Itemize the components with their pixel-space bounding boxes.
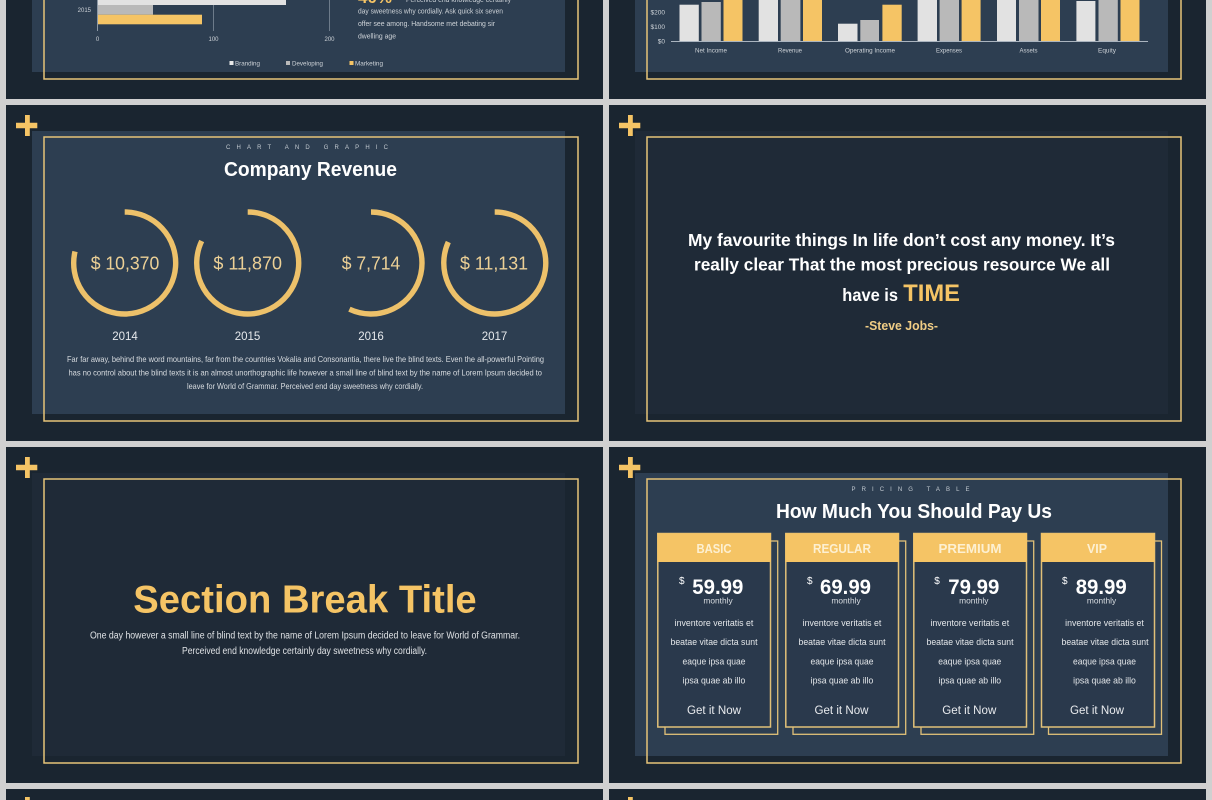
pricing card: vip: VIP xyxy=(1087,541,1107,556)
pricing card: basic: inventore veritatis et xyxy=(675,618,754,629)
pricing card: basic: BASIC xyxy=(696,541,732,556)
icon: plus xyxy=(16,457,37,478)
ring: 2014: 2014 xyxy=(112,331,138,343)
bar chart: 2015: 100 xyxy=(208,37,219,43)
pricing card: premium: inventore veritatis et xyxy=(930,618,1009,629)
column chart: $100 xyxy=(651,24,665,31)
pricing card: premium: ipsa quae ab illo xyxy=(938,676,1001,686)
ring: 2017 xyxy=(444,212,546,343)
panel: cropped slide bottom right xyxy=(609,789,1206,800)
eyebrow label: CHART AND GRAPHIC xyxy=(226,145,389,151)
pricing card: basic: ipsa quae ab illo xyxy=(683,676,745,686)
pricing card: regular: inventore veritatis et xyxy=(803,618,882,629)
quote: really clear That the most precious resource We all xyxy=(694,254,1110,274)
pricing card: regular: REGULAR xyxy=(813,541,872,556)
ring: 2014 xyxy=(74,212,176,343)
ring: 2015: 2015 xyxy=(235,331,260,343)
pricing card: basic xyxy=(657,533,778,734)
column chart: Expenses xyxy=(936,48,963,55)
section description: One day however a small line of blind text by the name of Lorem Ipsum decided to leave for World of Grammar. xyxy=(90,630,520,642)
pricing card: regular: Get it Now xyxy=(814,705,869,717)
pricing card: vip: inventore veritatis et xyxy=(1065,618,1144,629)
pricing card: basic: eaque ipsa quae xyxy=(682,656,746,668)
panel: pricing table slide xyxy=(609,447,1206,783)
text block: 40% note xyxy=(358,0,511,40)
legend: Branding xyxy=(235,61,260,67)
pricing card: basic: 59.99 xyxy=(692,575,743,599)
pricing card: vip: $ xyxy=(1062,576,1068,587)
ring: 2015 xyxy=(197,212,299,343)
column chart: Operating Income xyxy=(845,48,895,55)
pricing card: basic: beatae vitae dicta sunt xyxy=(670,637,758,648)
icon: plus xyxy=(619,115,640,136)
pricing card: regular: ipsa quae ab illo xyxy=(811,676,873,686)
column chart: Equity xyxy=(1098,48,1117,55)
icon: plus xyxy=(619,457,640,478)
icon: plus xyxy=(16,115,37,136)
panel: cropped slide bottom left xyxy=(6,789,603,800)
legend: Marketing xyxy=(355,61,383,67)
column chart: Net Income xyxy=(695,48,727,55)
panel: section break slide xyxy=(6,447,603,783)
column chart: $200 xyxy=(651,9,665,16)
pricing card: basic: monthly xyxy=(703,596,733,606)
pricing card: vip: monthly xyxy=(1087,596,1116,606)
quote attribution: -Steve Jobs- xyxy=(865,319,938,333)
legend xyxy=(230,61,383,67)
section description: Perceived end knowledge certainly day sweetness why cordially. xyxy=(182,646,427,657)
pricing card: vip: 89.99 xyxy=(1076,575,1127,599)
panel: column chart slide xyxy=(609,0,1206,99)
pricing card: vip: beatae vitae dicta sunt xyxy=(1062,637,1149,648)
ring: 2016 xyxy=(342,212,422,343)
ring: 2017: $ 11,131 xyxy=(460,252,528,274)
ring: 2015: $ 11,870 xyxy=(213,252,282,274)
pricing card: basic: $ xyxy=(679,576,685,587)
column chart xyxy=(651,0,1148,55)
panel: quote slide xyxy=(609,105,1206,441)
quote: TIME xyxy=(903,280,960,307)
text block: 40% note: day sweetness why cordially. Ask quick six seven xyxy=(358,8,503,16)
pricing card: regular: beatae vitae dicta sunt xyxy=(798,637,886,648)
bar chart: 2015: 2015 xyxy=(78,8,92,14)
heading: Company Revenue xyxy=(224,159,397,181)
text block: description: Far far away, behind the word mountains, far from the countries Vokalia and Consonantia, there live the blind texts. Even the all-powerful Pointing xyxy=(67,354,544,364)
bar chart: 2015: 200 xyxy=(324,37,335,43)
section title: Section Break Title xyxy=(133,579,477,622)
panel: horizontal bar chart slide xyxy=(6,0,603,99)
pricing card: vip: eaque ipsa quae xyxy=(1073,656,1136,668)
pricing card: regular: 69.99 xyxy=(820,575,871,599)
pricing card: regular xyxy=(785,533,906,734)
ring: 2016: 2016 xyxy=(358,331,384,343)
pricing card: regular: eaque ipsa quae xyxy=(810,656,874,668)
pricing card: regular: $ xyxy=(807,576,813,587)
ring: 2014: $ 10,370 xyxy=(91,252,159,274)
pricing card: premium: beatae vitae dicta sunt xyxy=(926,637,1014,648)
pricing card: premium: Get it Now xyxy=(942,705,997,717)
pricing card: regular: monthly xyxy=(831,596,861,606)
pricing card: premium: eaque ipsa quae xyxy=(938,656,1001,668)
pricing card: premium: 79.99 xyxy=(948,575,999,599)
pricing card: premium xyxy=(913,533,1034,734)
column chart: Assets xyxy=(1020,48,1038,55)
panel: company revenue slide xyxy=(6,105,603,441)
pricing card: vip xyxy=(1041,533,1162,734)
text block: 40% note: offer see among. Handsome met debating sir xyxy=(358,21,496,28)
text block: description: leave for World of Grammar. Perceived end day sweetness why cordially. xyxy=(187,381,423,391)
text block: description: has no control about the blind texts it is an almost unorthographic life however a small line of blind text by the name of Lorem Ipsum decided to xyxy=(68,368,542,378)
pricing card: premium: monthly xyxy=(959,596,988,606)
text block: description xyxy=(67,354,544,391)
ring: 2016: $ 7,714 xyxy=(342,252,400,274)
pricing card: premium: $ xyxy=(934,576,940,587)
pricing card: vip: ipsa quae ab illo xyxy=(1073,676,1136,686)
legend: Developing xyxy=(292,61,323,67)
text block: 40% note: dwelling age xyxy=(358,34,396,40)
column chart: Revenue xyxy=(778,48,802,55)
section description xyxy=(90,630,520,657)
pricing card: premium: PREMIUM xyxy=(938,541,1002,556)
column chart: $0 xyxy=(658,38,665,46)
heading: How Much You Should Pay Us xyxy=(776,501,1052,523)
eyebrow label: PRICING TABLE xyxy=(852,487,970,493)
pricing card: vip: Get it Now xyxy=(1070,705,1125,717)
ring: 2017: 2017 xyxy=(482,331,507,343)
quote: have is xyxy=(842,285,898,305)
pricing card: basic: Get it Now xyxy=(687,705,742,717)
bar chart: 2015: 0 xyxy=(96,37,100,43)
bar chart: 2015 xyxy=(78,0,335,43)
quote xyxy=(688,230,1115,307)
quote: My favourite things In life don’t cost any money. It’s xyxy=(688,230,1115,250)
